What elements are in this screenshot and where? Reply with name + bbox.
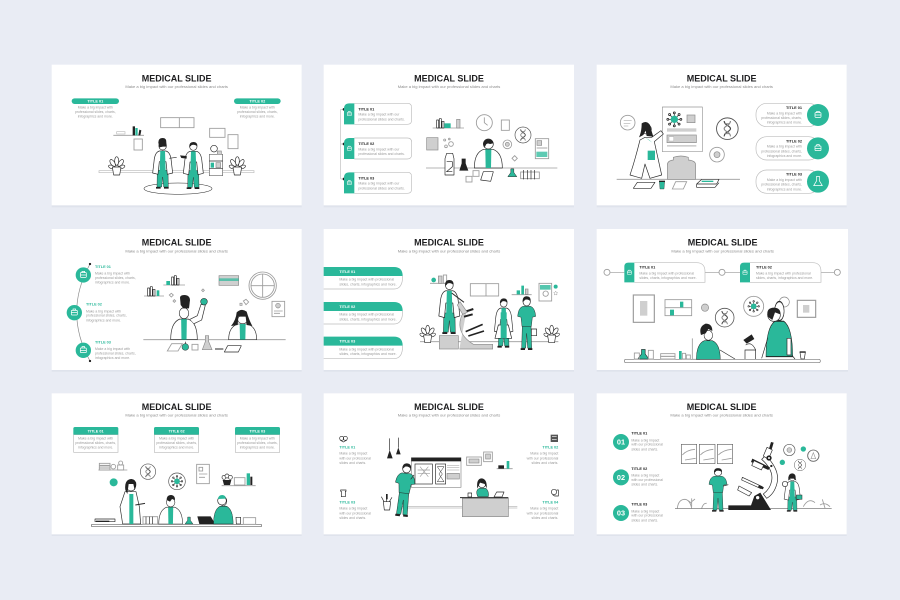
panel: slide 9 (597, 393, 847, 536)
item: title 03: professional slides, charts, (237, 441, 278, 445)
subtitle: Make a big impact with our professional slides and charts (398, 413, 500, 418)
item: title 01: TITLE 01 (88, 429, 105, 433)
item: title 01: TITLE 01 (95, 265, 112, 269)
callout: title 01: Make a big impact with (78, 106, 113, 110)
item: title 02: Make a big impact with our (358, 147, 400, 151)
callout: title 02 (234, 98, 281, 119)
item: title 01: infographics and more. (95, 281, 130, 285)
item: 02: TITLE 02 (631, 467, 647, 471)
item: title 01: TITLE 01 (339, 445, 356, 449)
item: title 02: TITLE 02 (786, 139, 802, 143)
item: title 03 (339, 490, 371, 520)
item: title 02: Make a big impact (530, 452, 558, 456)
item: title 03: professional slides, charts, (95, 351, 136, 355)
illustration: scientist at lab bench (426, 115, 557, 182)
heading: MEDICAL SLIDE (414, 238, 484, 248)
item: title 04: TITLE 04 (542, 500, 559, 504)
item: title 03: Make a big impact with professional (339, 347, 394, 351)
illustration: two doctors in a room (99, 118, 254, 194)
item: title 03: professional slides, charts, (761, 183, 802, 187)
item: title 04: Make a big impact (530, 507, 558, 511)
item: title 01: slides and charts. (339, 461, 366, 465)
item: title 01: professional slides, charts, (75, 441, 116, 445)
item: 01 (613, 432, 663, 451)
panel: slide 7 (52, 393, 302, 536)
item: title 03: TITLE 03 (786, 173, 802, 177)
panel: slide 1 (52, 65, 302, 207)
item: title 03: slides, charts, infographics and more. (339, 352, 397, 356)
item: title 02: TITLE 02 (358, 142, 374, 146)
item: title 03: TITLE 03 (95, 340, 111, 344)
item: title 01 (339, 436, 371, 465)
item: title 03: TITLE 03 (339, 500, 355, 504)
item: title 01: TITLE 01 (358, 107, 375, 111)
item: title 02: professional slides and charts. (358, 152, 405, 156)
subtitle: Make a big impact with our professional slides and charts (398, 248, 500, 253)
item: title 03 (344, 172, 412, 193)
subtitle: Make a big impact with our professional slides and charts (670, 84, 773, 89)
item: title 03 (756, 170, 829, 193)
item: title 04: with our professional (527, 511, 559, 515)
callout: title 02: infographics and more. (240, 115, 275, 119)
item: title 03: Make a big impact with (767, 178, 802, 182)
item: 03: 03 (617, 509, 625, 518)
subtitle: Make a big impact with our professional slides and charts (125, 248, 228, 253)
item: title 02 (756, 137, 829, 160)
item: title 03: with our professional (339, 511, 371, 515)
item: title 03: TITLE 03 (339, 340, 355, 344)
heading: MEDICAL SLIDE (414, 73, 484, 83)
item: title 03: slides and charts. (339, 516, 366, 520)
callout: title 02: TITLE 02 (249, 99, 265, 103)
item: title 01: Make a big impact with (95, 272, 130, 276)
item: title 02: infographics and more. (86, 318, 121, 322)
heading: MEDICAL SLIDE (687, 73, 757, 83)
heading: MEDICAL SLIDE (688, 238, 758, 248)
item: 01: Make a big impact (631, 438, 659, 442)
item: title 03: TITLE 03 (249, 429, 265, 433)
item: title 02: infographics and more. (767, 154, 802, 158)
item: 02: 02 (617, 473, 625, 482)
item: title 02: professional slides, charts, (156, 441, 197, 445)
item: title 02: TITLE 02 (756, 265, 772, 269)
item: title 01: slides, charts, infographics and more. (339, 282, 397, 286)
item: title 03: Make a big impact (339, 507, 367, 511)
item: title 01: professional slides, charts, (95, 276, 136, 280)
illustration: doctor presenting board (617, 107, 740, 189)
item: title 01: Make a big impact (339, 452, 367, 456)
item: title 02: professional slides, charts, (86, 314, 127, 318)
item: 01: with our professional (631, 443, 663, 447)
item: title 04 (527, 489, 559, 520)
connector line with nodes (604, 269, 840, 275)
heading: MEDICAL SLIDE (687, 402, 757, 412)
item: title 01: professional slides, charts, (761, 116, 802, 120)
item: title 01: professional slides and charts. (358, 117, 405, 121)
item: title 02: slides and charts. (531, 461, 558, 465)
item: title 02: Make a big impact with (86, 309, 121, 313)
illustration: reception desk with nurse (381, 438, 517, 517)
item: title 01 (624, 263, 705, 282)
item: title 02: with our professional (527, 456, 559, 460)
item: title 02: Make a big impact with (767, 145, 802, 149)
item: title 01: Make a big impact with (767, 111, 802, 115)
item: title 03 (324, 337, 403, 359)
item: title 01 (324, 267, 403, 289)
panel: slide 3 (597, 65, 847, 207)
item: title 01: TITLE 01 (786, 106, 803, 110)
illustration: two scientists at bench (143, 272, 286, 352)
item: title 02 (740, 263, 821, 282)
item: 02: Make a big impact (631, 474, 659, 478)
item: title 01: infographics and more. (78, 446, 113, 450)
item: 02: slides and charts. (631, 483, 658, 487)
illustration: colleagues at a long desk (624, 295, 820, 363)
item: title 01: Make a big impact with our (358, 113, 400, 117)
item: title 02 (344, 138, 412, 159)
panel: slide 2 (324, 65, 574, 207)
item: title 01: TITLE 01 (639, 265, 656, 269)
illustration: microscope and medical team (419, 275, 560, 350)
item: 03 (613, 503, 663, 522)
item: title 01: Make a big impact with professional (339, 278, 394, 282)
heading: MEDICAL SLIDE (142, 73, 212, 83)
panel: slide 6 (597, 229, 848, 372)
item: title 02: TITLE 02 (339, 305, 355, 309)
item: title 03 (235, 427, 280, 452)
item: title 03: TITLE 03 (358, 176, 374, 180)
item: title 02: Make a big impact with (159, 437, 194, 441)
heading: MEDICAL SLIDE (142, 402, 212, 412)
item: title 01: with our professional (339, 456, 371, 460)
item: title 02: Make a big impact with professional (756, 272, 811, 276)
item: title 01: infographics and more. (767, 121, 802, 125)
item: title 03 (76, 340, 136, 360)
item: title 03: infographics and more. (95, 356, 130, 360)
item: title 01 (756, 103, 829, 127)
item: title 02: TITLE 02 (542, 445, 558, 449)
callout: title 01: TITLE 01 (87, 99, 104, 103)
item: title 03: professional slides and charts. (358, 186, 405, 190)
item: title 02: infographics and more. (159, 446, 194, 450)
item: title 03: infographics and more. (240, 446, 275, 450)
callout: title 01 (72, 98, 119, 119)
subtitle: Make a big impact with our professional slides and charts (398, 84, 500, 89)
illustration: giant microscope with staff (675, 442, 832, 512)
item: title 03: Make a big impact with our (358, 182, 400, 186)
item: title 02 (527, 435, 559, 465)
item: 01: TITLE 01 (631, 432, 648, 436)
item: 03: TITLE 03 (631, 503, 647, 507)
item: title 01: slides, charts, infographics and more. (639, 276, 697, 280)
item: 03: with our professional (631, 514, 663, 518)
item: title 02: TITLE 02 (169, 429, 185, 433)
timeline connector (341, 108, 345, 180)
item: title 03: infographics and more. (767, 187, 802, 191)
panel: slide 4 (52, 229, 302, 372)
item: title 02 (324, 302, 403, 324)
item: title 02: professional slides, charts, (761, 149, 802, 153)
heading: MEDICAL SLIDE (142, 238, 212, 248)
panel: slide 5 (324, 229, 574, 372)
item: title 01: Make a big impact with (78, 437, 113, 441)
item: title 01 (76, 265, 136, 285)
callout: title 02: Make a big impact with (240, 106, 275, 110)
callout: title 02: professional slides, charts, (237, 110, 278, 114)
item: 01: 01 (617, 438, 625, 447)
item: title 01: Make a big impact with professional (639, 272, 694, 276)
illustration: team at bench (91, 461, 262, 527)
item: title 01 (344, 103, 412, 124)
subtitle: Make a big impact with our professional slides and charts (125, 413, 228, 418)
item: title 01 (73, 427, 118, 452)
item: title 02: TITLE 02 (86, 303, 102, 307)
item: title 02 (67, 303, 127, 322)
item: title 03: Make a big impact with (240, 437, 275, 441)
subtitle: Make a big impact with our professional slides and charts (671, 248, 774, 253)
item: title 03: Make a big impact with (95, 347, 130, 351)
item: 03: Make a big impact (631, 509, 659, 513)
item: 02: with our professional (631, 478, 663, 482)
heading: MEDICAL SLIDE (414, 402, 484, 412)
item: title 02: slides, charts, infographics and more. (339, 317, 397, 321)
item: 01: slides and charts. (631, 447, 658, 451)
item: title 02: Make a big impact with professional (339, 313, 394, 317)
subtitle: Make a big impact with our professional slides and charts (125, 84, 228, 89)
item: title 02 (154, 427, 199, 452)
item: title 02: slides, charts, infographics and more. (756, 276, 813, 280)
item: title 01: TITLE 01 (339, 270, 356, 274)
item: 03: slides and charts. (631, 518, 658, 522)
curved timeline (77, 263, 91, 362)
callout: title 01: infographics and more. (78, 115, 113, 119)
item: 02 (613, 467, 663, 487)
panel: slide 8 (324, 393, 574, 536)
callout: title 01: professional slides, charts, (75, 110, 116, 114)
subtitle: Make a big impact with our professional slides and charts (670, 413, 773, 418)
item: title 04: slides and charts. (531, 516, 558, 520)
